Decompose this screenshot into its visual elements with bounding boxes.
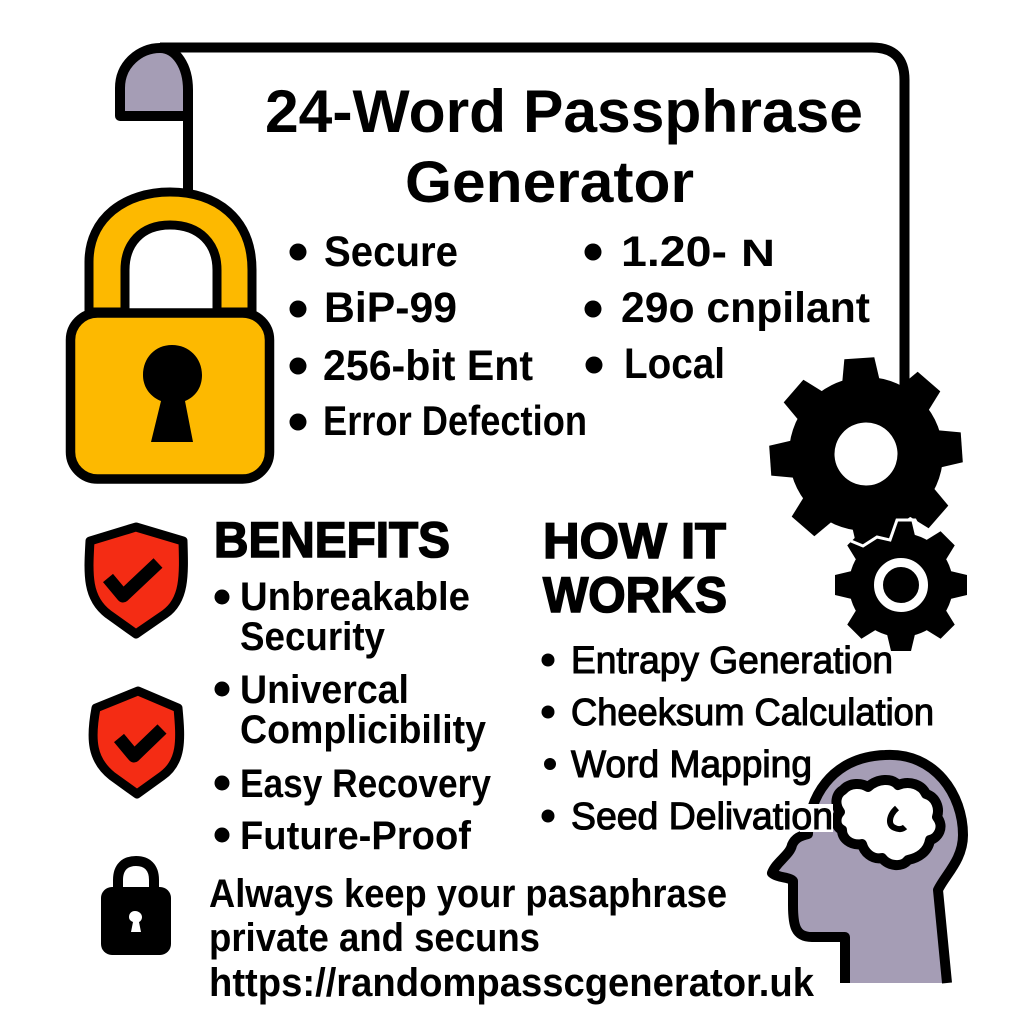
icon: small padlock	[101, 861, 171, 955]
footer note: https://randompasscgenerator.uk	[209, 961, 815, 1005]
title: 24-Word Passphrase	[265, 78, 863, 145]
how it works list: Word Mapping	[571, 744, 812, 786]
feature list, right column: 1.20-	[621, 228, 727, 276]
footer note: Always keep your pasaphrase	[209, 872, 727, 916]
how it works heading: WORKS	[543, 567, 727, 623]
benefits list: Future-Proof	[240, 814, 472, 858]
benefits heading: BENEFITS	[214, 512, 450, 568]
feature list, right column: 29o cnpilant	[621, 284, 870, 332]
feature list, left column: BiP-99	[324, 284, 457, 332]
how it works list: Cheeksum Calculation	[571, 692, 934, 734]
how it works list	[542, 640, 934, 838]
benefits list: Unbreakable	[240, 575, 470, 619]
title: Generator	[405, 150, 694, 215]
benefits list	[214, 575, 492, 858]
large gear	[764, 352, 968, 556]
brain fold	[890, 808, 905, 829]
how it works list: Entrapy Generation	[571, 640, 893, 682]
feature list, left column: Error Defection	[323, 397, 587, 444]
benefits list: Security	[240, 615, 386, 659]
footer note	[209, 872, 815, 1005]
how it works heading: HOW IT	[543, 513, 726, 569]
feature list, left column: 256-bit Ent	[323, 342, 533, 390]
benefits list: Complicibility	[240, 708, 487, 752]
feature list, right column	[584, 228, 870, 388]
how it works heading	[543, 513, 727, 623]
feature list, right column: N	[741, 233, 775, 275]
icon: large padlock	[70, 192, 270, 479]
benefits list: Easy Recovery	[240, 762, 492, 806]
how it works list: Seed Delivation	[571, 796, 833, 838]
small gear	[835, 519, 967, 651]
feature list, left column: Secure	[324, 228, 458, 276]
brain	[836, 780, 941, 865]
scroll tab	[120, 48, 188, 116]
icon: shield two	[93, 691, 180, 794]
feature list, right column: Local	[624, 340, 725, 388]
icon: gears	[764, 352, 968, 651]
scroll frame	[120, 48, 904, 390]
title	[265, 78, 863, 215]
icon: head with brain	[772, 755, 963, 983]
feature list, left column	[290, 228, 587, 444]
benefits list: Univercal	[240, 668, 409, 712]
icon: shield one	[89, 527, 183, 634]
footer note: private and secuns	[209, 916, 540, 960]
